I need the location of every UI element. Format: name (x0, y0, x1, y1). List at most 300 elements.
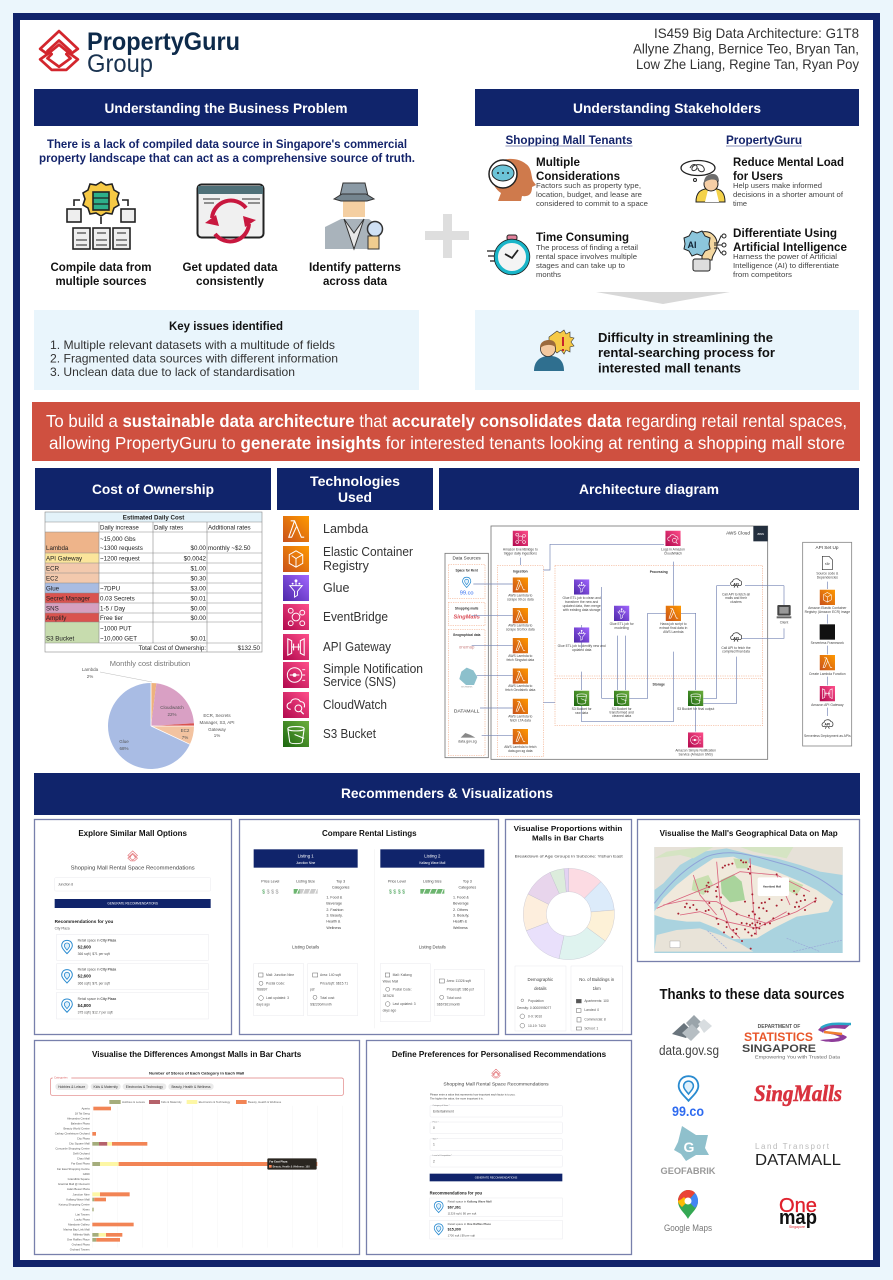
logo: PropertyGuru Group: Group (87, 50, 153, 78)
panel: define preferences: 11326 sqft | $6 per sqft (448, 1211, 477, 1215)
panel: explore similar mall options: Retail space in City Plaza (78, 938, 116, 942)
table: estimated daily cost: $3.00 (191, 586, 207, 592)
heading: Understanding Stakeholders: Understanding Stakeholders (573, 100, 761, 116)
caption: compile data: multiple sources (56, 274, 147, 288)
table: estimated daily cost (45, 512, 262, 652)
panel: compare rental listings: Wave Mall (383, 979, 398, 983)
chart: architecture diagram: Call API to fetch all (722, 593, 750, 597)
panel: bar chart of malls: Delfi Orchard (73, 1152, 90, 1156)
panel: proportions donut chart: details (534, 986, 547, 991)
panel: proportions donut chart: Commercial: 8 (584, 1017, 606, 1021)
table: estimated daily cost: S3 Bucket (46, 636, 74, 642)
chart: architecture diagram: Call API to fetch the (721, 646, 751, 650)
chart: architecture diagram: Amazon Elastic Container (808, 606, 847, 610)
text: time consuming: months (536, 270, 561, 279)
arrow: down triangle (596, 292, 730, 304)
chart: monthly cost distribution pie: ECR, Secrets (203, 713, 231, 718)
table: estimated daily cost: ~10,000 GET (100, 636, 137, 642)
table: estimated daily cost: 0.03 Secrets (100, 596, 135, 602)
panel: explore similar mall options: Retail space in City Plaza (78, 997, 116, 1001)
panel: compare rental listings: Wellness (453, 926, 468, 930)
chart: monthly cost distribution pie: 22% (167, 712, 177, 717)
panel: compare rental listings: Beverage (453, 902, 469, 906)
team credits: IS459 Big Data Architecture: G1T8 (654, 25, 859, 41)
panel: bar chart of malls: Concorde Shopping Centre (55, 1147, 90, 1151)
logo: Geofabrik (660, 1126, 716, 1176)
text: time consuming: Time Consuming (536, 230, 629, 244)
chart: architecture diagram: AWS Lambda to (508, 624, 533, 628)
subheading: Shopping Mall Tenants: Shopping Mall Tenants (506, 133, 633, 147)
panel: explore similar mall options: Junction 8 (58, 883, 73, 887)
chart: architecture diagram: S3 Bucket for (572, 707, 593, 711)
logo: Google Maps (664, 1190, 712, 1233)
chart: architecture diagram: AWS Lambda (663, 630, 684, 634)
chart: architecture diagram: data.gov.sg (458, 739, 477, 743)
panel: proportions donut chart: Landed: 0 (584, 1008, 599, 1012)
panel: compare rental listings: Health & (326, 920, 341, 924)
chart: architecture diagram: scrape SGXxx data (506, 628, 535, 632)
panel: bar chart of malls: Categories (54, 1076, 68, 1080)
text: multiple considerations: considered to commit to a space (536, 199, 648, 208)
logo: Land Transport DataMall: Land Transport (755, 1142, 830, 1151)
panel: define preferences (366, 1040, 632, 1254)
panel: define preferences: Entertainment (433, 1110, 454, 1114)
chart: architecture diagram: data.gov.sg data (508, 749, 533, 753)
table: estimated daily cost: $0.30 (191, 576, 207, 582)
chart: architecture diagram: S3 Bucket for final output (677, 707, 714, 711)
icon: AI light bulb (684, 231, 726, 271)
heading: Understanding Stakeholders (475, 89, 859, 126)
list: technologies used (283, 516, 423, 747)
chart: architecture diagram: Processing (650, 570, 668, 574)
panel: compare rental listings: 1. Food & (453, 895, 469, 899)
panel: key issues: Key issues identified (169, 319, 283, 333)
map of Singapore (654, 847, 843, 953)
technology: S3 Bucket (283, 721, 376, 747)
table: estimated daily cost: $0.00 (191, 615, 207, 622)
table: estimated daily cost: ~15,000 Gbs (100, 536, 136, 543)
panel: compare rental listings: Wellness (326, 926, 341, 930)
panel: define preferences: Please enter a value that represents how important each factor is to you. (430, 1092, 516, 1096)
technology: API Gateway (283, 634, 392, 660)
chart: monthly cost distribution pie: 2% (87, 674, 93, 679)
chart: architecture diagram: Dependencies (817, 575, 838, 579)
panel: compare rental listings: Price Level (261, 879, 280, 883)
caption: detective: Identify patterns (309, 260, 401, 274)
icon: head with thought (489, 159, 536, 201)
technology: Elastic Container Registry: Registry (323, 559, 370, 573)
heading: Architecture diagram (439, 468, 859, 510)
chart: monthly cost distribution pie: Manager, S3, API (199, 720, 235, 725)
panel: compare rental listings: Postal Code: (393, 988, 412, 992)
panel: bar chart of malls: Grantral Mall @ Clementi (58, 1182, 90, 1186)
table: estimated daily cost: API Gateway (46, 556, 83, 562)
logo: PropertyGuru Group (40, 28, 240, 78)
panel: difficulty callout (475, 310, 859, 390)
technology: Elastic Container Registry (283, 545, 413, 573)
panel: proportions donut chart: Population (528, 999, 544, 1003)
panel: compare rental listings: days ago (256, 1003, 270, 1007)
panel: compare rental listings: S$2200/month (310, 1003, 332, 1007)
panel: compare rental listings: Top 3 (336, 879, 345, 883)
team credits (633, 25, 859, 72)
chart: architecture diagram: API (733, 583, 739, 587)
icon: detective (325, 183, 382, 249)
caption: detective: across data (323, 274, 387, 288)
chart: architecture diagram: transformed and (610, 710, 634, 714)
chart: architecture diagram: Glue ETL job for (610, 622, 635, 626)
panel: define preferences: $67,361 (448, 1205, 461, 1209)
chart: architecture diagram: Amazon EventBridge to (503, 547, 538, 551)
technology: SNS: Service (SNS) (323, 675, 396, 689)
panel: compare rental listings: Listing Size (423, 879, 442, 883)
panel: bar chart of malls: Far East Plaza (71, 1162, 90, 1166)
chart: architecture diagram: Serverless Framework (811, 641, 844, 645)
panel: proportions donut chart: Density: 0.0000995077 (517, 1006, 551, 1010)
panel: compare rental listings: Listing 2 (424, 853, 441, 858)
table: estimated daily cost: $1.00 (191, 566, 207, 572)
table: estimated daily cost: Additional rates (208, 524, 251, 532)
panel: difficulty callout: Difficulty in streamlining the (598, 330, 773, 345)
panel: define preferences: Recommendations for you (430, 1190, 483, 1195)
problem statement: There is a lack of compiled data source in Singapore's commercial (47, 137, 407, 151)
icon: compile data (67, 182, 135, 249)
chart: architecture diagram: Amazon API Gateway (811, 703, 844, 707)
panel: compare rental listings: Last updated: 3 (393, 1002, 416, 1006)
panel: bar chart of malls: GRiD (83, 1172, 90, 1176)
icon: AI light bulb: AI (688, 240, 696, 250)
icon: person with tangled thought (681, 160, 725, 202)
table: estimated daily cost: ECR (46, 566, 60, 572)
technology: SNS: Simple Notification (323, 662, 423, 676)
chart: architecture diagram: with existing data storage (563, 608, 601, 612)
panel: bar chart of malls: Hobbies & Leisure (58, 1085, 85, 1089)
panel: proportions donut chart: Demographic (527, 977, 554, 982)
panel: compare rental listings: Postal Code: (266, 982, 285, 986)
text: differentiate using AI: Artificial Intelligence (733, 240, 847, 254)
panel: compare rental listings: Categories (332, 885, 350, 889)
panel: bar chart of malls: Marina Bay Link Mall (63, 1227, 90, 1231)
panel: compare rental listings: Area: 11326 sqft (447, 979, 471, 983)
panel: bar chart of malls: Kallang Wave Mall (66, 1197, 90, 1201)
chart: architecture diagram: AWS Lambda to (508, 654, 533, 658)
map of Singapore: Heartland Mall (763, 885, 781, 889)
panel: proportions donut chart: 1km (593, 986, 601, 991)
icon: updated data (198, 184, 264, 241)
panel: geographical map: Visualise the Mall's Geographical Data on Map (660, 829, 838, 838)
panel: define preferences: Category of Store * (433, 1104, 450, 1107)
text: time consuming (536, 230, 638, 279)
panel: bar chart of malls: Lucky Plaza (74, 1217, 90, 1221)
panel: explore similar mall options (34, 820, 232, 1034)
chart: architecture diagram: CloudWatch (664, 551, 682, 555)
chart: monthly cost distribution pie: Cloudwatch (160, 705, 184, 710)
chart: architecture diagram: Serverless Deployment as APIs (804, 734, 851, 738)
panel: define preferences: 2 (433, 1159, 435, 1163)
technology: EventBridge (283, 604, 388, 630)
panel: compare rental listings: Total cost: (320, 996, 335, 1000)
caption: compile data (50, 260, 152, 288)
panel: explore similar mall options: Recommendations for you (55, 919, 114, 924)
tooltip: Far East Plaza (269, 1159, 288, 1163)
banner: project goal: allowing PropertyGuru to generate insights for interested tenants looking at renting a shopping mall store (49, 433, 845, 453)
table: estimated daily cost: Estimated Daily Cost (123, 514, 184, 522)
text: reduce mental load (733, 155, 844, 208)
table: estimated daily cost: Free tier (100, 615, 123, 622)
heading: Technologies Used (277, 468, 433, 510)
caption: compile data: Compile data from (50, 260, 152, 274)
legend: Kids & Maternity (161, 1100, 182, 1104)
technology: Glue (283, 575, 349, 601)
panel: compare rental listings: days ago (383, 1009, 396, 1013)
heading: Technologies Used: Technologies (310, 473, 400, 489)
panel: difficulty callout: rental-searching process for (598, 345, 775, 360)
panel: proportions donut chart: School: 1 (584, 1026, 598, 1030)
chart: architecture diagram: Logs in Amazon (661, 547, 685, 551)
heading: Technologies Used: Used (338, 489, 372, 505)
logo: Geofabrik: G (684, 1139, 695, 1155)
chart: architecture diagram: API (825, 722, 830, 726)
panel: key issues: 2. Fragmented data sources with different information (50, 352, 338, 366)
chart: monthly cost distribution pie: EC2 (181, 728, 190, 733)
text: reduce mental load: decisions in a shorter amount of (733, 190, 844, 199)
table: estimated daily cost: $0.00 (191, 545, 207, 552)
logo: data.gov.sg: data.gov.sg (659, 1043, 719, 1058)
icon: stressed person (534, 330, 574, 371)
chart: architecture diagram: API Set Up (815, 545, 839, 550)
technology: Lambda (283, 516, 368, 542)
chart: architecture diagram: Registry (Amazon ECR) image (805, 610, 850, 614)
chart: architecture diagram: Glue ETL job to clean and (562, 596, 601, 600)
panel: compare rental listings: Mall: Junction Nine (266, 973, 294, 977)
chart: architecture diagram: Hawa job script to (660, 622, 687, 626)
chart: architecture diagram: AWS Lambda to (508, 684, 533, 688)
text: multiple considerations: location, budget, and lease are (536, 190, 642, 199)
chart: architecture diagram: Space for Rent (456, 569, 479, 573)
text: reduce mental load: time (733, 199, 747, 208)
text: reduce mental load: Help users make informed (733, 181, 822, 190)
logo: OneMap (779, 1195, 817, 1229)
tooltip: Beauty, Health & Wellness: 160 (273, 1165, 310, 1169)
panel: compare rental listings: 3. Beauty, (453, 914, 469, 918)
logo: Department of Statistics Singapore (742, 1023, 851, 1060)
table: estimated daily cost: $0.01 (191, 636, 207, 642)
chart: architecture diagram: updated data, then merge (563, 604, 601, 608)
panel: bar chart of malls: Number of Stores of Each Category in Each Mall (149, 1071, 244, 1075)
legend: Electronics & Technology (199, 1100, 231, 1104)
panel: compare rental listings: Top 3 (463, 879, 472, 883)
panel: bar chart of malls: One Raffles Place (67, 1238, 90, 1242)
chart: architecture diagram: Geographical data (453, 633, 481, 637)
chart: architecture diagram: GEOFABRIK (461, 686, 473, 689)
chart: architecture diagram: DATAMALL (454, 708, 480, 714)
text: multiple considerations: Multiple (536, 155, 580, 169)
panel: compare rental listings: $ $ $ $ (262, 890, 279, 896)
caption: detective (309, 260, 401, 288)
panel: proportions donut chart (506, 820, 632, 1034)
problem statement (39, 137, 415, 165)
chart: monthly cost distribution pie: 68% (119, 746, 129, 751)
chart: architecture diagram: fetch LTA data (510, 719, 531, 723)
panel: compare rental listings: Health & (453, 920, 468, 924)
panel: explore similar mall options: City Plaza (55, 927, 70, 931)
chart: age group donut (523, 868, 614, 960)
panel: bar chart of malls: Kinex (83, 1207, 90, 1211)
icon: stopwatch (487, 235, 530, 275)
panel: define preferences: GENERATE RECOMMENDATIONS (475, 1176, 517, 1180)
chart: architecture diagram: cleaned data (612, 714, 631, 718)
panel: define preferences: 0 (433, 1126, 435, 1130)
chart: monthly cost distribution pie: 7% (182, 735, 188, 740)
panel: compare rental listings: Compare Rental Listings (322, 829, 417, 838)
table: estimated daily cost: ~1300 requests (100, 545, 143, 552)
chart: architecture diagram: Source code & (816, 571, 839, 575)
panel: key issues: 1. Multiple relevant datasets with a multitude of fields (50, 338, 335, 352)
chart: architecture diagram: AWS Lambda to fetch (504, 745, 537, 749)
panel: explore similar mall options: $2,600 (78, 974, 91, 979)
table: estimated daily cost: ~7DPU (100, 586, 120, 592)
table: estimated daily cost: Secret Manager (46, 596, 90, 602)
plus sign (425, 214, 469, 258)
panel: compare rental listings: Listing Size (296, 879, 315, 883)
panel: bar chart of malls: Jalan Besar Plaza (67, 1187, 90, 1191)
panel: bar chart of malls: Visualise the Differences Amongst Malls in Bar Charts (92, 1050, 302, 1059)
panel: compare rental listings: 3. Beauty, (326, 914, 343, 918)
panel: bar chart of malls (34, 1040, 360, 1254)
panel: compare rental listings: Price/sqft: S$6 psf (447, 988, 474, 992)
chart: architecture diagram: API (733, 637, 739, 641)
text: differentiate using AI: from competitors (733, 270, 792, 279)
banner: project goal (32, 402, 860, 461)
heading: Cost of Ownership (35, 468, 271, 510)
panel: compare rental listings: Total cost: (447, 996, 462, 1000)
table: estimated daily cost: 1-5 / Day (100, 606, 126, 612)
chart: architecture diagram: aws (757, 532, 764, 536)
panel: bar chart of malls: Aperia (81, 1106, 90, 1110)
panel: explore similar mall options: GENERATE RECOMMENDATIONS (107, 902, 158, 906)
panel: compare rental listings: S$67361/month (437, 1003, 460, 1007)
technology: Elastic Container Registry: Elastic Container (323, 545, 413, 559)
panel: explore similar mall options: 375 sqft | $12.7 per sqft (78, 1011, 113, 1015)
chart: architecture diagram: trigger daily ingestions (504, 551, 537, 555)
chart: architecture diagram: extract final data in (659, 626, 687, 630)
logo: Google Maps: Google Maps (664, 1223, 712, 1233)
panel: proportions donut chart: Breakdown of Age Groups in Subzone: Yishun East (515, 855, 624, 859)
panel: compare rental listings: 1. Food & (326, 895, 343, 899)
panel: explore similar mall options: 366 sqft | $71 per sqft (78, 981, 110, 985)
panel: define preferences: Price * (433, 1121, 439, 1124)
text: differentiate using AI: Differentiate Using (733, 226, 837, 240)
problem statement: property landscape that can act as a comprehensive source of truth. (39, 151, 415, 165)
technology: SNS (283, 662, 423, 689)
text: time consuming: rental space involves multiple (536, 252, 637, 261)
technology: EventBridge: EventBridge (323, 610, 388, 624)
text: differentiate using AI: Intelligence (AI) to differentiate (733, 261, 839, 270)
logo: Department of Statistics Singapore: SINGAPORE (742, 1043, 816, 1055)
table: estimated daily cost: Glue (46, 586, 60, 592)
team credits: Allyne Zhang, Bernice Teo, Bryan Tan, (633, 40, 859, 56)
text: multiple considerations (536, 155, 648, 208)
legend: Hobbies & Leisure (122, 1100, 146, 1104)
panel: bar chart of malls: Alexandra Central (67, 1116, 90, 1120)
panel: define preferences: Size * (433, 1138, 438, 1140)
legend (109, 1100, 282, 1104)
panel: bar chart of malls: City Square Mall (69, 1142, 90, 1146)
chart: architecture diagram: Storage (652, 682, 665, 686)
panel: bar chart of malls: Katong Shopping Centre (59, 1202, 90, 1206)
panel: define preferences: 1700 sqft | $9 per sqft (448, 1234, 475, 1238)
heading: Understanding the Business Problem: Understanding the Business Problem (104, 100, 348, 116)
table: estimated daily cost: $132.50 (238, 645, 261, 652)
table: estimated daily cost: Daily increase (100, 524, 139, 532)
panel: define preferences: Retail space in One Raffles Place (448, 1222, 491, 1226)
panel: compare rental listings: Area: 140 sqft (320, 973, 341, 977)
text: time consuming: The process of finding a retail (536, 243, 638, 252)
chart: architecture diagram: Ingestion (513, 569, 528, 573)
chart: architecture diagram: Client (780, 621, 788, 625)
panel: compare rental listings: 387628 (383, 994, 394, 998)
panel: explore similar mall options: $4,800 (78, 1003, 91, 1008)
panel: compare rental listings (240, 820, 498, 1034)
panel: define preferences: 1 (433, 1143, 435, 1147)
chart: architecture diagram: updated data (572, 648, 592, 652)
text: differentiate using AI: Harness the power of Artificial (733, 252, 837, 261)
chart: architecture diagram: </> (825, 562, 830, 566)
panel: bar chart of malls: Orchard Towers (70, 1247, 90, 1251)
logo: Department of Statistics Singapore: Empowering You with Trusted Data (755, 1054, 840, 1060)
logo: data.gov.sg (659, 1015, 719, 1058)
panel: proportions donut chart: No. of Buildings in (579, 977, 615, 982)
heading: Cost of Ownership: Cost of Ownership (92, 481, 214, 497)
chart: architecture diagram: fetch Singstat data (507, 658, 534, 662)
panel: define preferences: $15,300 (448, 1228, 461, 1232)
panel: compare rental listings: 2. Others (453, 908, 468, 912)
table: estimated daily cost: Lambda (46, 545, 69, 552)
table: estimated daily cost: EC2 (46, 576, 59, 582)
table: estimated daily cost: Total Cost of Ownership: (139, 645, 206, 652)
table: estimated daily cost: monthly ~$2.50 (208, 545, 251, 552)
chart: architecture diagram: clusters (730, 600, 742, 604)
chart: architecture diagram: AWS Lambda to (508, 715, 533, 719)
chart: architecture diagram: transform the new and (565, 600, 598, 604)
panel: compare rental listings: Listing Details (419, 945, 446, 950)
logo: Department of Statistics Singapore: STATISTICS (744, 1030, 813, 1044)
subheading: PropertyGuru: PropertyGuru (726, 133, 802, 147)
chart: architecture diagram: Glue ETL job to identify new and (558, 644, 606, 648)
chart: architecture diagram: Data Sources (453, 556, 481, 561)
logo: PropertyGuru Group: PropertyGuru (87, 28, 240, 56)
panel: difficulty callout: interested mall tenants (598, 360, 741, 376)
caption: updated data: Get updated data (182, 260, 278, 274)
panel: compare rental listings: Last updated: 3 (266, 996, 289, 1000)
chart: architecture diagram: 99.co (460, 590, 474, 596)
chart: architecture diagram: S3 Bucket for (612, 707, 633, 711)
technology: CloudWatch (283, 692, 387, 718)
panel: bar chart of malls: 18 Tai Seng (75, 1111, 90, 1115)
panel: bar chart of malls: Electronics & Technology (126, 1085, 163, 1089)
panel: bar chart of malls: Beauty World Centre (63, 1127, 90, 1131)
heading: Understanding the Business Problem (34, 89, 418, 126)
technology: Lambda: Lambda (323, 522, 368, 536)
chart: monthly cost distribution pie: Lambda (82, 667, 99, 672)
table: estimated daily cost: Amplify (46, 615, 67, 622)
panel: define preferences: Shopping Mall Rental Space Recommendations (443, 1082, 549, 1088)
logo: Land Transport DataMall: DATAMALL (755, 1152, 841, 1169)
panel: proportions donut chart: Apartments: 100 (584, 999, 609, 1003)
logo: OneMap: Singapore (789, 1225, 805, 1229)
technology: S3 Bucket: S3 Bucket (323, 727, 376, 741)
text: reduce mental load: Reduce Mental Load (733, 155, 844, 169)
